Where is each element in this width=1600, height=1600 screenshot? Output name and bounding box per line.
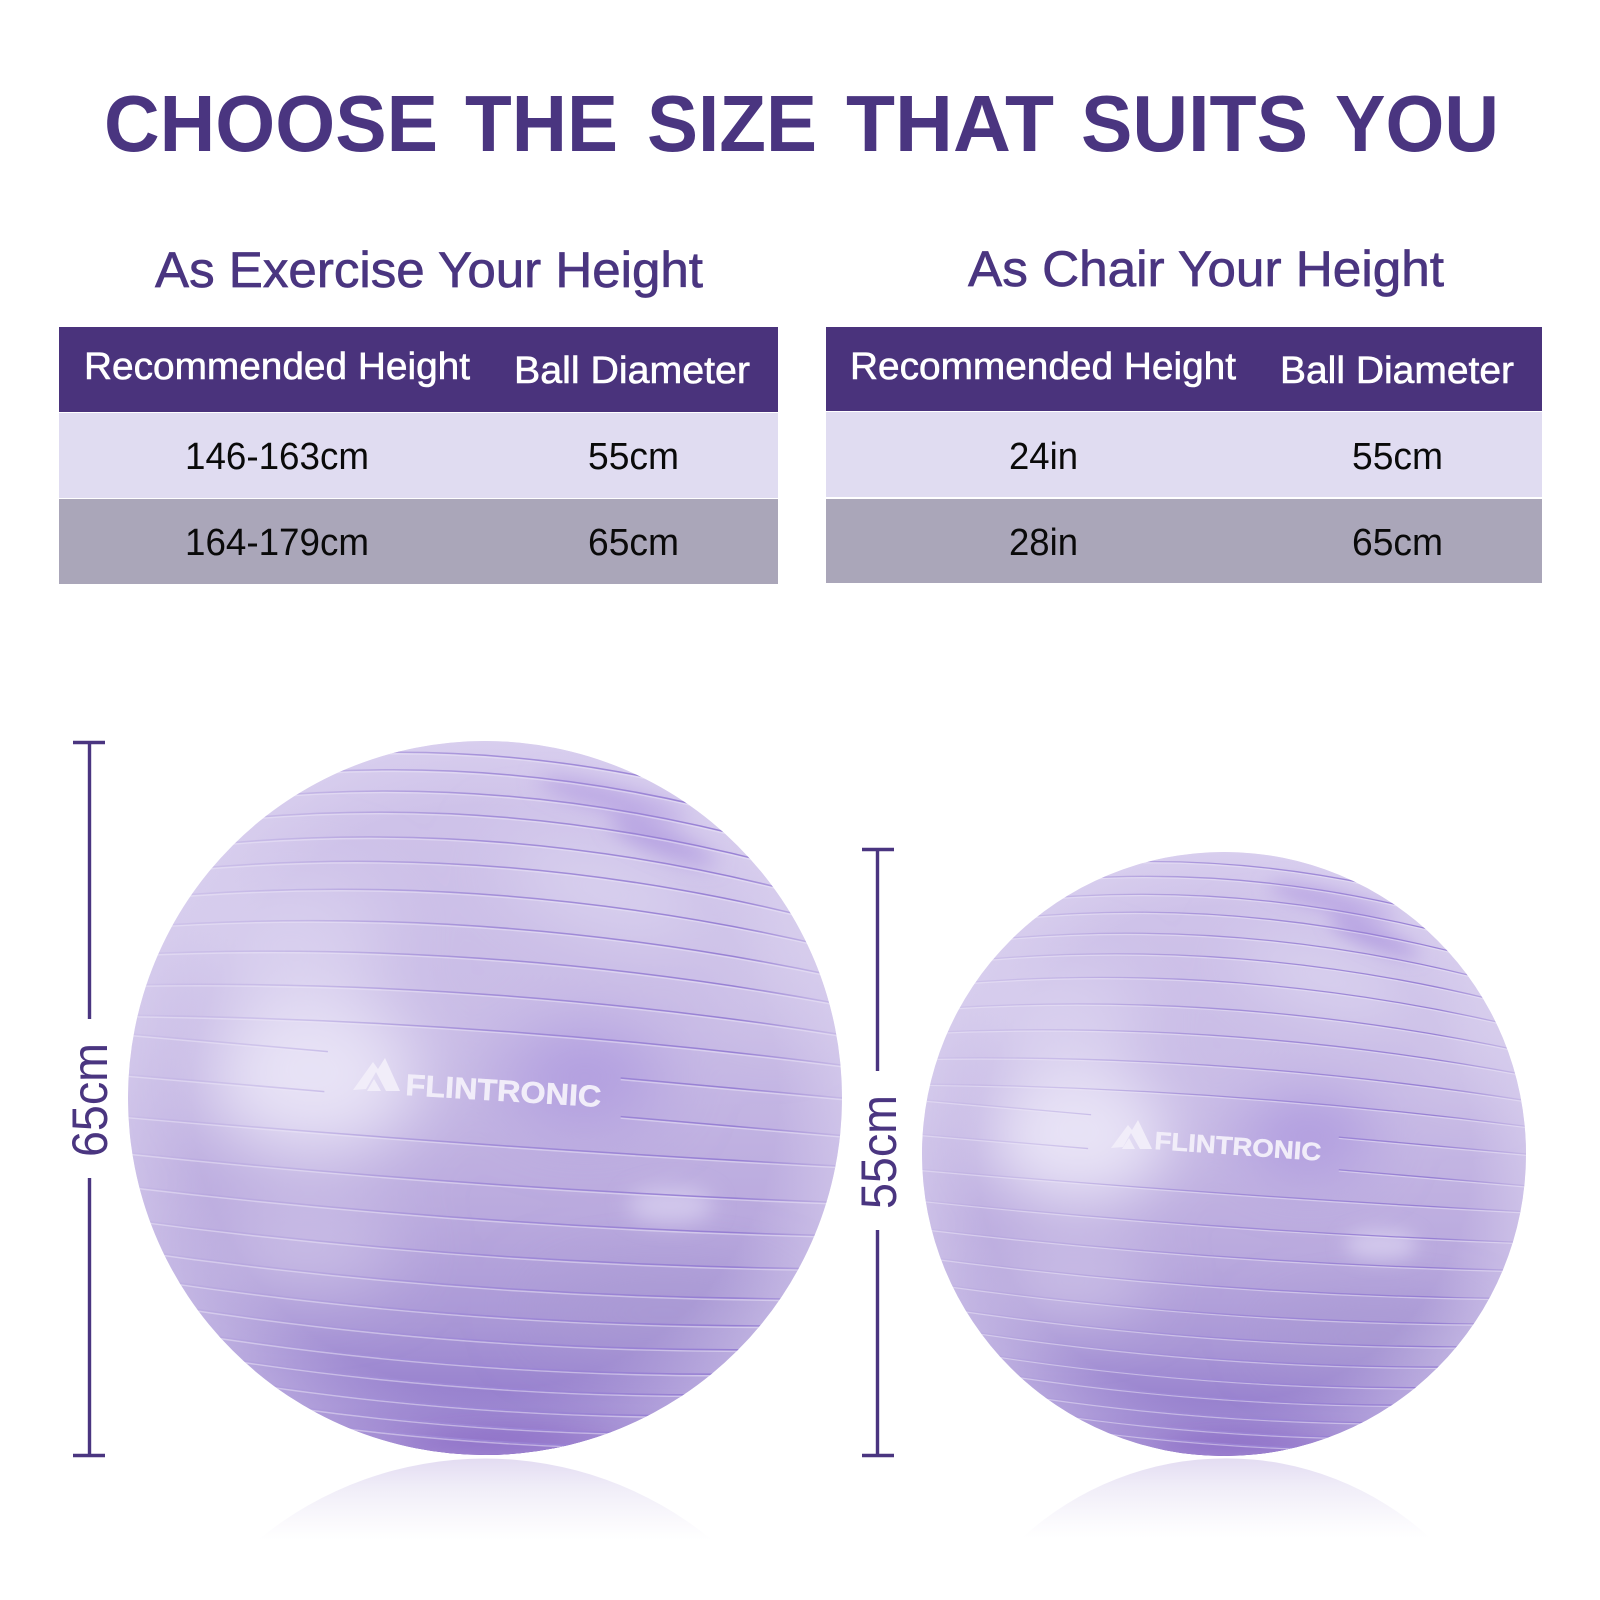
chair table header row: Ball Diameter	[1280, 350, 1514, 392]
large 65cm exercise ball	[128, 741, 842, 1469]
chair table row 65cm: 28in	[1009, 522, 1078, 564]
chair table row 65cm: 65cm	[1352, 522, 1443, 564]
dimension marker: 55cm: 55cm	[851, 1095, 907, 1209]
title: THE	[465, 79, 618, 168]
dimension marker: 65cm	[62, 742, 118, 1456]
title: SIZE	[647, 79, 817, 168]
title: CHOOSE	[104, 79, 438, 168]
logo on small ball	[1111, 1120, 1322, 1167]
title: THAT	[846, 79, 1054, 168]
exercise table header row	[59, 327, 778, 412]
title: YOU	[1335, 79, 1499, 168]
reflection under large ball	[258, 1459, 712, 1540]
exercise table row 55cm: 146-163cm	[185, 436, 369, 478]
reflection under small ball	[1022, 1458, 1430, 1538]
chair table header row: Recommended Height	[850, 346, 1236, 388]
exercise table row 55cm: 55cm	[588, 436, 679, 478]
logo on small ball: FLINTRONIC	[1154, 1127, 1322, 1167]
dimension marker: 65cm: 65cm	[62, 1043, 118, 1157]
exercise table row 65cm: 65cm	[588, 522, 679, 564]
exercise table row 55cm	[59, 413, 778, 498]
chair table row 65cm	[826, 499, 1542, 583]
chair table row 55cm: 55cm	[1352, 436, 1443, 478]
logo on large ball	[353, 1058, 602, 1114]
chair table row 55cm	[826, 412, 1542, 497]
exercise table header row: Ball Diameter	[514, 350, 750, 392]
chair table row 55cm: 24in	[1009, 436, 1078, 478]
title: SUITS	[1081, 79, 1308, 168]
title	[104, 79, 1499, 168]
small 55cm exercise ball	[922, 852, 1526, 1468]
exercise table row 65cm: 164-179cm	[185, 522, 369, 564]
heading: as exercise: As Exercise Your Height	[155, 242, 703, 298]
table: chair height	[826, 327, 1542, 583]
chair table header row	[826, 327, 1542, 411]
logo on large ball: FLINTRONIC	[405, 1069, 602, 1114]
heading: as chair: As Chair Your Height	[968, 241, 1444, 297]
exercise table header row: Recommended Height	[84, 346, 470, 388]
exercise table row 65cm	[59, 499, 778, 584]
table: exercise height	[59, 327, 778, 584]
dimension marker: 55cm	[851, 849, 907, 1456]
